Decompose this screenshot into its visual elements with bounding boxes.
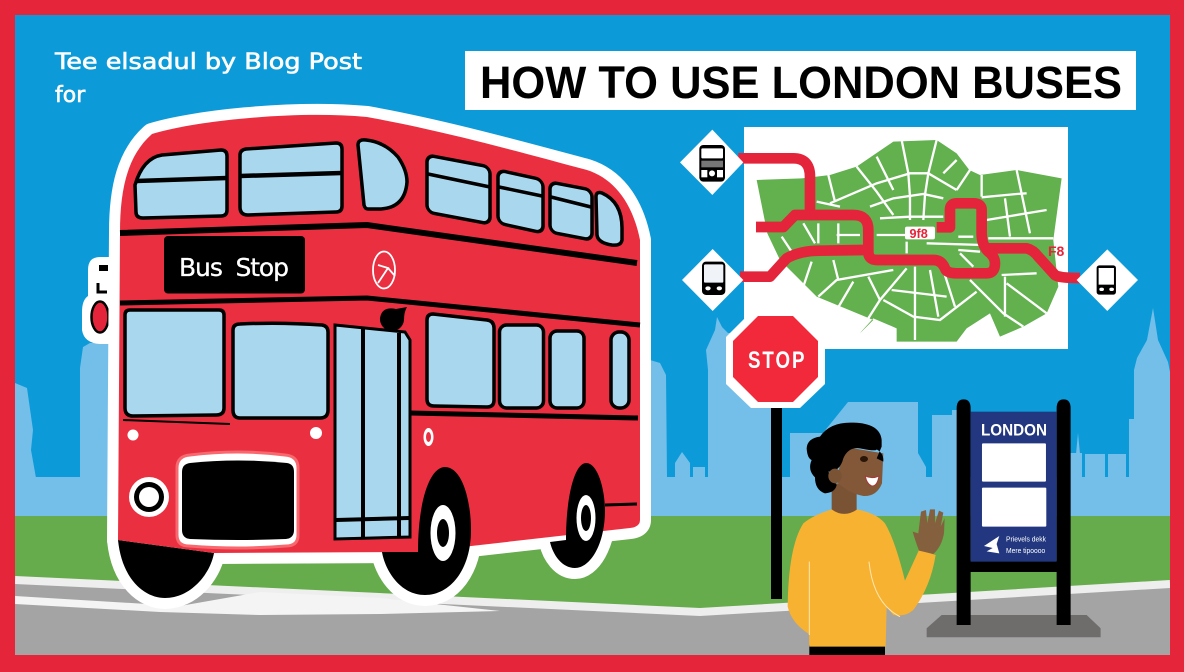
icon: bus diamond right: [1077, 249, 1138, 311]
route number right: F8: [1048, 243, 1065, 259]
bus stop information board: [927, 399, 1101, 637]
bus side mirror: [82, 257, 125, 344]
lower window sill: [123, 420, 230, 424]
board right post: [1057, 399, 1071, 625]
upper deck windows: [135, 140, 622, 245]
road: [15, 578, 1170, 655]
sign pole: [771, 400, 782, 599]
octagon white edge: [726, 312, 825, 408]
grass: [15, 516, 1170, 616]
octagon red face: [733, 316, 818, 402]
board cross bar: [970, 561, 1057, 572]
city skyline: [15, 308, 1170, 519]
timetable box lower: [982, 488, 1046, 527]
mouth: [865, 476, 879, 486]
icon: bus diamond top left: [680, 130, 743, 195]
green boroughs: [757, 140, 1062, 342]
subtitle: [54, 50, 362, 108]
route label centre: [905, 227, 935, 239]
road markings under bus: [15, 592, 500, 615]
bus body: [118, 115, 640, 553]
subtitle line two: for: [55, 83, 86, 108]
lower deck windows: [125, 310, 629, 418]
kerb line: [15, 580, 1170, 612]
sweater: [788, 509, 936, 647]
stop text: STOP: [748, 347, 806, 374]
board small print one: Prievels dekk: [1006, 534, 1046, 543]
panel: route map: [680, 127, 1138, 349]
board panel: [971, 412, 1057, 562]
subtitle line one: Tee elsadul by Blog Post: [54, 50, 362, 75]
icon: bus diamond lower left: [682, 249, 743, 311]
destination sign: [164, 236, 305, 294]
stop sign: [726, 312, 825, 599]
white sticker outline: [118, 115, 640, 598]
waving hand: [913, 509, 945, 554]
board heading: LONDON: [981, 420, 1047, 439]
title text: HOW TO USE LONDON BUSES: [480, 57, 1122, 108]
middle wheel: [382, 467, 471, 595]
timetable box upper: [982, 443, 1046, 482]
ear: [828, 469, 842, 483]
front wheel: [118, 540, 214, 598]
double decker bus: [82, 115, 640, 598]
person waving: [788, 423, 945, 655]
rear wheel: [550, 463, 605, 568]
board small print two: Mere tipoooo: [1006, 546, 1045, 555]
eye: [860, 456, 868, 462]
title: [465, 51, 1136, 110]
headlight: [129, 477, 169, 517]
face: [837, 447, 883, 496]
hair: [807, 423, 883, 493]
radiator grille: [177, 452, 298, 548]
red bus route lines: [738, 158, 1080, 278]
board base: [927, 615, 1101, 637]
trousers: [809, 645, 885, 655]
sweater highlights: [809, 562, 900, 635]
body stripes: [120, 225, 640, 505]
borough boundary lines: [782, 140, 1053, 340]
destination sign: Bus Stop: [179, 253, 289, 282]
title background: [465, 51, 1136, 110]
bus logo: [373, 252, 395, 288]
board left post: [957, 399, 971, 625]
map of London districts and routes: [680, 130, 1138, 342]
map background: [744, 127, 1068, 349]
indicator lights: [128, 427, 434, 446]
wing mirror: [380, 307, 407, 331]
door: [335, 325, 410, 539]
route number centre: 9f8: [909, 227, 928, 241]
window bars: [136, 173, 591, 207]
icon: direction arrow: [984, 536, 999, 553]
neck: [832, 483, 857, 515]
